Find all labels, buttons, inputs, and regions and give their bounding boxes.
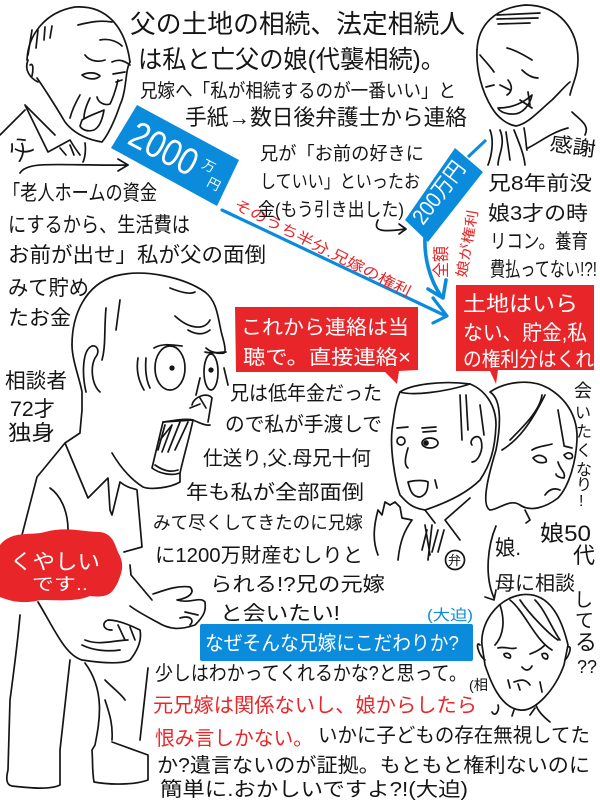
figure: niece bbox=[486, 382, 577, 523]
vertical text: do not want to meet: 会 bbox=[574, 381, 592, 401]
question banner bbox=[200, 624, 473, 661]
money box: 2000 man yen bbox=[111, 105, 239, 206]
title text block bbox=[130, 9, 467, 130]
figure: ex-wife mother bbox=[478, 594, 570, 722]
text block: consulting the mother: て bbox=[575, 611, 594, 632]
main narrative text block: 仕送り,父.母兄十何 bbox=[203, 447, 371, 470]
vertical text: do not want to meet: い bbox=[575, 405, 591, 422]
arrow: full amount to niece bbox=[425, 237, 446, 298]
label: consultant profile: 独身 bbox=[8, 422, 55, 445]
arrow: to 200 man yen bbox=[376, 220, 406, 234]
main narrative text block: みて尽くしてきたのに兄嫁 bbox=[153, 513, 363, 533]
text block: nursing home savings quote: たお金 bbox=[8, 307, 71, 330]
text block: nursing home savings quote: みて貯め bbox=[8, 277, 89, 300]
vertical text: do not want to meet: ! bbox=[579, 493, 583, 510]
main narrative text block: と会いたい! bbox=[220, 602, 340, 625]
figure: brother portrait bbox=[477, 5, 586, 165]
text block: consulting the mother: る bbox=[575, 630, 597, 655]
speech bubble: niece bbox=[456, 285, 594, 384]
vertical text: do not want to meet bbox=[574, 381, 592, 510]
speech bubble: niece: の権利分はくれ bbox=[463, 348, 594, 371]
figure: consultant shocked man bbox=[7, 273, 228, 788]
money box: 200 man yen: 200万円 bbox=[407, 156, 470, 229]
label: niece age: 代 bbox=[573, 543, 595, 568]
speech blob: frustrated: くやしい bbox=[10, 551, 100, 574]
main narrative text block: ので私が手渡しで bbox=[225, 413, 382, 436]
arrow: half share to niece bbox=[222, 210, 447, 323]
answer text block: 恨み言しかない。 bbox=[155, 727, 313, 750]
red note: full amount, niece's right bbox=[432, 209, 481, 279]
vertical text: do not want to meet: く bbox=[576, 443, 592, 460]
figure: lawyer bbox=[374, 383, 496, 570]
speech blob: frustrated bbox=[0, 529, 122, 602]
label: father: 父 bbox=[5, 132, 37, 166]
text block: consulting the mother: 母に相談 bbox=[495, 572, 575, 595]
speech blob: frustrated: です.. bbox=[32, 575, 88, 594]
answer text block: (相 bbox=[469, 677, 488, 693]
main narrative text block: られる!?兄の元嫁 bbox=[210, 573, 385, 596]
vertical text: do not want to meet: た bbox=[576, 423, 592, 441]
red note: full amount, niece's right: 娘が権利 bbox=[453, 209, 481, 279]
text block: brother told me bbox=[258, 143, 424, 220]
speech bubble: lawyer bbox=[235, 307, 418, 384]
text block: brother details: 娘3才の時 bbox=[488, 202, 588, 225]
label: gratitude: 感謝 bbox=[548, 132, 597, 161]
speech bubble: lawyer: 聴で。直接連絡× bbox=[243, 346, 411, 369]
label: consultant profile: 相談者 bbox=[5, 370, 67, 393]
credit: oosako: (大迫) bbox=[427, 607, 473, 624]
main narrative text block bbox=[153, 382, 385, 625]
title text block: 手紙→数日後弁護士から連絡 bbox=[185, 105, 467, 130]
label: consultant profile bbox=[5, 370, 67, 445]
question banner: なぜそんな兄嫁にこだわりか? bbox=[205, 632, 459, 655]
label: niece age: 娘50 bbox=[540, 521, 591, 546]
money box: 200 man yen bbox=[405, 140, 486, 242]
title text block: 兄嫁へ「私が相続するのが一番いい」と bbox=[140, 80, 456, 102]
text block: consulting the mother: 娘. bbox=[495, 537, 521, 560]
answer text block: 少しはわかってくれるかな?と思って。 bbox=[155, 662, 467, 685]
text block: brother details: 兄8年前没 bbox=[488, 172, 592, 195]
text block: brother told me: 兄が「お前の好きに bbox=[260, 143, 424, 164]
answer text block bbox=[153, 662, 590, 800]
answer text block: か?遺言ないのが証拠。もともと権利ないのに bbox=[157, 754, 590, 777]
title text block: 父の土地の相続、法定相続人 bbox=[130, 9, 465, 39]
main narrative text block: 年も私が全部面倒 bbox=[186, 481, 364, 504]
speech bubble: niece: ない、貯金,私 bbox=[463, 322, 587, 345]
main narrative text block: に1200万財産むしりと bbox=[155, 544, 363, 567]
text block: consulting the mother bbox=[495, 537, 597, 677]
money box: 2000 man yen: 円 bbox=[205, 174, 223, 194]
red note: half is niece's right: そのうち半分.兄嫁の権利 bbox=[231, 196, 414, 301]
text block: nursing home savings quote bbox=[3, 182, 266, 330]
text block: nursing home savings quote: にするから、生活費は bbox=[8, 214, 190, 237]
money box: 2000 man yen: 万 bbox=[200, 156, 218, 176]
main narrative text block: 兄は低年金だった bbox=[230, 382, 382, 405]
vertical text: do not want to meet: な bbox=[576, 461, 592, 479]
text block: consulting the mother: し bbox=[574, 590, 593, 611]
text block: nursing home savings quote: 「老人ホームの資金 bbox=[3, 182, 157, 205]
answer text block: いかに子どもの存在無視してた bbox=[318, 724, 590, 747]
label: niece age bbox=[540, 521, 595, 568]
text block: brother told me: していい」といったお bbox=[260, 171, 420, 192]
arrow: niece to mother bbox=[485, 526, 496, 600]
text block: consulting the mother: ?? bbox=[577, 657, 597, 677]
label: consultant profile: 72才 bbox=[10, 398, 55, 421]
vertical text: do not want to meet: り bbox=[576, 477, 592, 494]
arrow: father to money bbox=[20, 159, 128, 173]
title text block: は私と亡父の娘(代襲相続)。 bbox=[138, 46, 445, 74]
speech bubble: lawyer: これから連絡は当 bbox=[241, 316, 409, 339]
money box: 2000 man yen: 2000 bbox=[122, 114, 205, 185]
text block: nursing home savings quote: お前が出せ」私が父の面倒 bbox=[8, 244, 266, 267]
icon: lawyer badge: 弁 bbox=[448, 553, 461, 568]
answer text block: 元兄嫁は関係ないし、娘からしたら bbox=[153, 694, 477, 717]
figure: father portrait bbox=[0, 7, 130, 162]
text block: brother told me: 金(もう引き出した) bbox=[258, 199, 404, 220]
text block: brother details bbox=[488, 172, 597, 281]
red note: full amount, niece's right: 全額 bbox=[432, 246, 451, 278]
speech bubble: niece: 土地はいら bbox=[463, 293, 578, 316]
